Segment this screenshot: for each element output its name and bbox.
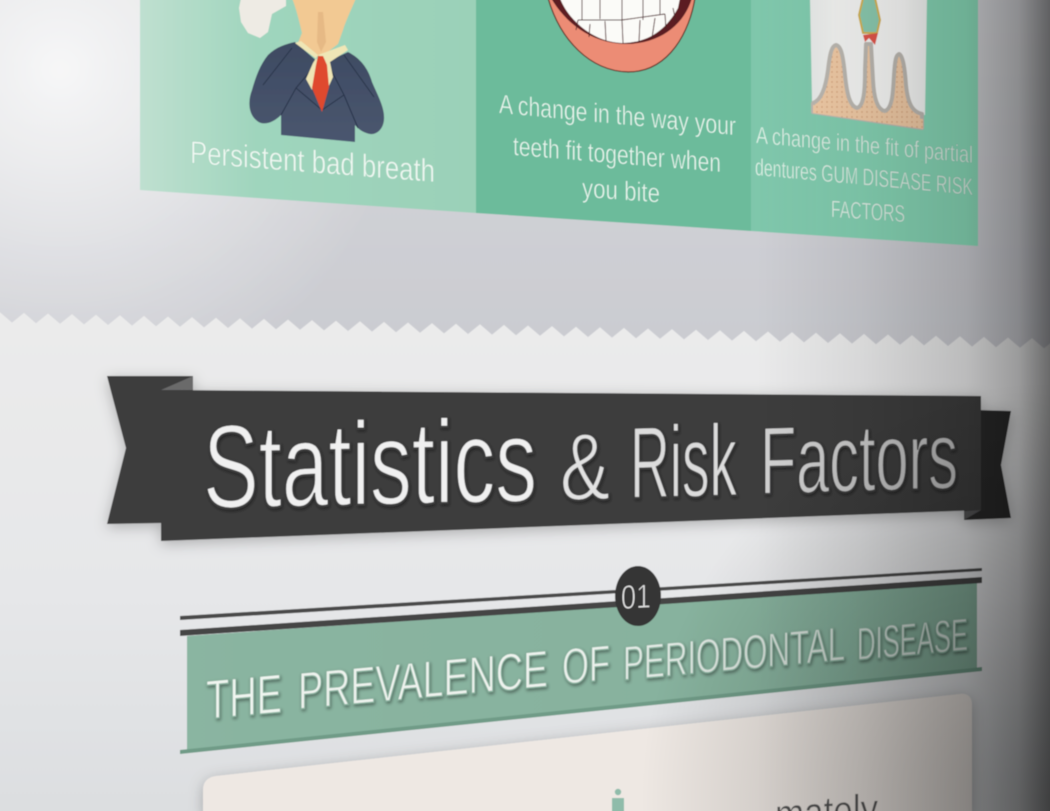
caption: change in denture fit: FACTORS <box>831 196 905 228</box>
lips <box>548 0 695 72</box>
suit <box>249 42 384 142</box>
caption: change in bite: teeth fit together when <box>513 131 721 178</box>
thick rule <box>180 577 982 636</box>
left fold <box>161 376 193 390</box>
title text: Risk <box>630 403 738 520</box>
caption: persistent bad breath: Persistent bad breath <box>190 134 435 189</box>
section heading text: OF <box>562 635 610 695</box>
icon: smiling teeth <box>548 0 695 72</box>
bone and gum <box>813 44 922 128</box>
band bottom edge <box>180 667 982 754</box>
background: upper grey area <box>0 0 1050 395</box>
title text: & <box>560 414 610 521</box>
tooth enamel <box>810 0 927 115</box>
caption: change in denture fit: A change in the fit of partial <box>756 122 973 169</box>
number badge: 01 <box>621 578 651 617</box>
tooth pulp <box>859 0 880 33</box>
section heading text: THE <box>206 662 282 731</box>
panel: change in bite <box>476 0 751 231</box>
caption: change in bite: you bite <box>582 173 660 208</box>
content card <box>203 694 972 811</box>
background: lower area with zigzag edge <box>0 312 1050 811</box>
right fold <box>964 510 981 520</box>
red tie <box>312 56 329 112</box>
ribbon shape <box>107 376 1011 541</box>
caption: change in bite: A change in the way your <box>499 89 736 141</box>
background: top-left highlight <box>0 0 495 415</box>
thin rule <box>180 568 982 620</box>
title text <box>203 395 958 534</box>
mouth interior <box>551 0 692 44</box>
panel: persistent bad breath <box>140 0 476 213</box>
green heading band <box>187 582 977 751</box>
icon: small person <box>612 789 624 811</box>
section header: 01 prevalence <box>180 566 982 754</box>
section heading text <box>206 608 968 731</box>
panel: change in partial dentures fit <box>751 0 978 246</box>
infected root tip <box>863 33 878 45</box>
hands and neck <box>292 0 356 58</box>
icon: tooth cross-section <box>810 0 927 129</box>
title ribbon <box>107 376 1011 541</box>
collar <box>295 41 348 90</box>
tooth separators <box>576 0 676 43</box>
bad breath cloud <box>239 0 286 38</box>
number badge <box>615 566 661 626</box>
section heading text: PERIODONTAL <box>623 617 845 691</box>
right tail <box>964 410 1011 520</box>
icon: man covering face in suit <box>239 0 384 142</box>
caption: change in bite <box>499 89 736 208</box>
teeth <box>560 0 680 43</box>
title text: Statistics <box>203 395 537 534</box>
caption: change in denture fit <box>755 122 973 228</box>
main band <box>161 390 981 541</box>
section heading text: PREVALENCE <box>298 640 548 721</box>
left tail <box>107 376 193 524</box>
